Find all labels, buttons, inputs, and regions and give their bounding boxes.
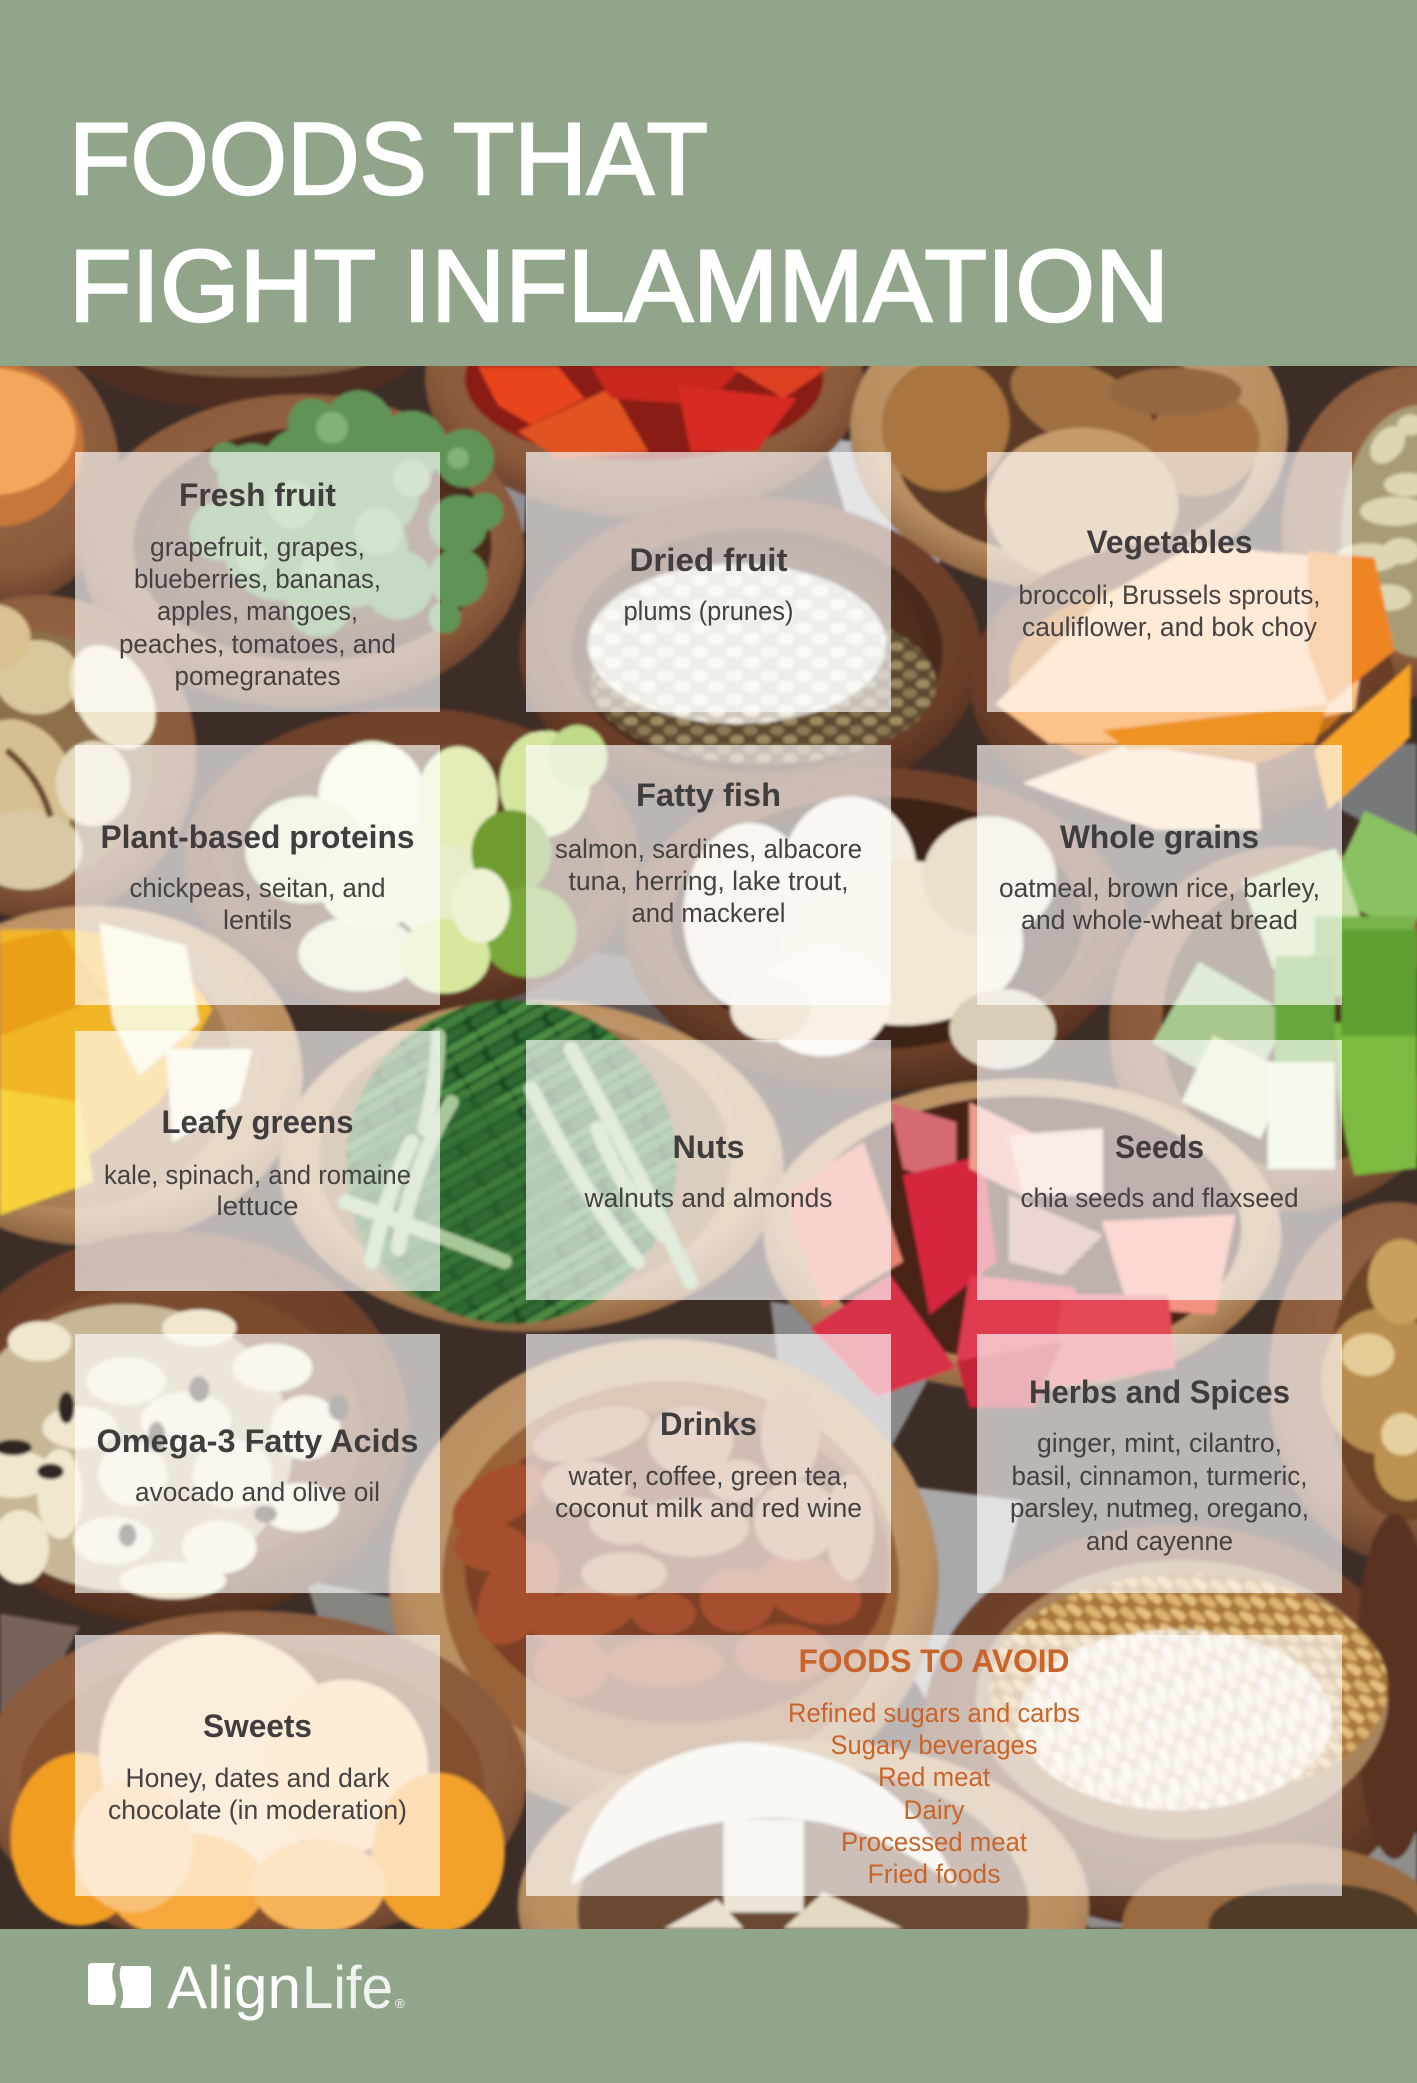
panel: leafy greens	[75, 1031, 440, 1291]
panel: plant-based proteins: Plant-based proteins	[100, 819, 414, 855]
panel: foods to avoid: Processed meat	[841, 1827, 1027, 1857]
panel: sweets: Sweets	[203, 1708, 312, 1744]
panel: plant-based proteins: lentils	[223, 905, 292, 935]
panel: nuts: walnuts and almonds	[584, 1183, 832, 1213]
panel: omega-3 fatty acids: Omega-3 Fatty Acids	[96, 1423, 418, 1459]
title: FOODS THAT	[69, 102, 708, 216]
panel: fatty fish	[526, 745, 891, 1005]
panel: plant-based proteins	[75, 745, 440, 1005]
panel: foods to avoid: Sugary beverages	[830, 1730, 1038, 1760]
panel: fresh fruit: pomegranates	[174, 661, 340, 691]
panel: whole grains	[977, 745, 1342, 1005]
bowl: almonds	[850, 272, 1288, 591]
panel: vegetables: broccoli, Brussels sprouts,	[1018, 580, 1320, 610]
bowl: white fish	[624, 768, 1129, 1092]
panel: drinks: water, coffee, green tea,	[568, 1461, 848, 1491]
bowl: oranges	[969, 541, 1410, 830]
panel: foods to avoid: Fried foods	[868, 1859, 1000, 1889]
panel: nuts: Nuts	[672, 1129, 744, 1165]
panel: nuts	[526, 1040, 891, 1300]
logo: AlignLife	[88, 1954, 405, 2021]
panel: drinks	[526, 1334, 891, 1593]
panel: fatty fish: salmon, sardines, albacore	[555, 834, 862, 864]
panel: omega-3 fatty acids: avocado and olive oil	[135, 1477, 380, 1507]
panel: omega-3 fatty acids	[75, 1334, 440, 1593]
panel: vegetables	[987, 452, 1352, 712]
logo: AlignLife: Life	[302, 1954, 393, 2021]
panel: fatty fish: Fatty fish	[636, 777, 781, 813]
panel: herbs and spices: parsley, nutmeg, oregano,	[1010, 1493, 1309, 1523]
title	[69, 102, 1169, 343]
panel: seeds	[977, 1040, 1342, 1300]
panel: sweets	[75, 1635, 440, 1896]
bowl: pistachios	[0, 595, 197, 919]
panel: drinks: Drinks	[660, 1406, 757, 1442]
panel: foods to avoid: Dairy	[904, 1795, 965, 1825]
panel: fresh fruit: peaches, tomatoes, and	[119, 629, 396, 659]
bowl: black-eyed beans	[0, 1231, 409, 1624]
panel: whole grains: and whole-wheat bread	[1021, 905, 1298, 935]
panel: fatty fish: and mackerel	[632, 898, 786, 928]
bowl: leeks	[183, 708, 640, 1013]
bowl: seeds bottom right	[1122, 1843, 1417, 2008]
bowl: red peppers	[425, 239, 863, 518]
panel: vegetables: Vegetables	[1086, 524, 1252, 560]
title: FIGHT INFLAMMATION	[69, 229, 1169, 343]
bowl: mango	[0, 906, 303, 1246]
panel: dried fruit: plums (prunes)	[624, 596, 794, 626]
panel: herbs and spices: basil, cinnamon, turmeric,	[1012, 1461, 1308, 1491]
panel: fresh fruit	[75, 452, 440, 712]
panel: herbs and spices: ginger, mint, cilantro,	[1037, 1428, 1282, 1458]
bowl: mushroom	[518, 1740, 1089, 2072]
bowl: mandarin	[0, 1611, 527, 1948]
panel: whole grains: Whole grains	[1060, 819, 1259, 855]
bowl: kidney beans	[389, 1339, 939, 1822]
logo: AlignLife: Align	[167, 1954, 301, 2021]
bowl: green beans	[279, 1000, 784, 1332]
panel: whole grains: oatmeal, brown rice, barley,	[999, 873, 1320, 903]
bowl: celery	[1109, 811, 1417, 1212]
panel: drinks: coconut milk and red wine	[555, 1493, 862, 1523]
bowl: top nuts	[73, 287, 418, 409]
bowl: white seeds	[519, 497, 981, 810]
panel: foods to avoid: Refined sugars and carbs	[788, 1698, 1080, 1728]
panel: leafy greens: Leafy greens	[162, 1104, 354, 1140]
panel: foods to avoid: FOODS TO AVOID	[798, 1643, 1070, 1679]
panel: foods to avoid	[526, 1635, 1342, 1896]
header band	[0, 0, 1417, 366]
bowl: walnuts	[1268, 1202, 1417, 1560]
logo: AlignLife: ®	[395, 1996, 405, 2011]
panel: sweets: Honey, dates and dark	[126, 1763, 390, 1793]
panel: herbs and spices: and cayenne	[1086, 1526, 1233, 1556]
panel: fatty fish: tuna, herring, lake trout,	[568, 866, 848, 896]
panel: fresh fruit: apples, mangoes,	[157, 596, 358, 626]
panel: dried fruit	[526, 452, 891, 712]
panel: dried fruit: Dried fruit	[630, 542, 788, 578]
bowl: pale beans right	[1282, 365, 1417, 697]
panel: seeds: Seeds	[1115, 1129, 1204, 1165]
panel: leafy greens: lettuce	[216, 1191, 298, 1221]
panel: fresh fruit: grapefruit, grapes,	[150, 532, 365, 562]
panel: seeds: chia seeds and flaxseed	[1020, 1183, 1298, 1213]
panel: herbs and spices: Herbs and Spices	[1029, 1374, 1290, 1410]
panel: foods to avoid: Red meat	[878, 1762, 990, 1792]
bowl: kale	[81, 390, 525, 708]
panel: leafy greens: kale, spinach, and romaine	[104, 1160, 411, 1190]
panel: sweets: chocolate (in moderation)	[108, 1795, 407, 1825]
panel: fresh fruit: Fresh fruit	[179, 477, 336, 513]
panel: vegetables: cauliflower, and bok choy	[1022, 612, 1317, 642]
bowl: sweet potato	[0, 339, 120, 604]
bowl: flaxseed and sesame	[923, 1514, 1417, 1928]
panel: herbs and spices	[977, 1334, 1342, 1593]
footer band	[0, 1929, 1417, 2083]
panel: fresh fruit: blueberries, bananas,	[134, 564, 381, 594]
panel: plant-based proteins: chickpeas, seitan, and	[130, 873, 386, 903]
bowl: rhubarb	[764, 1078, 1282, 1408]
